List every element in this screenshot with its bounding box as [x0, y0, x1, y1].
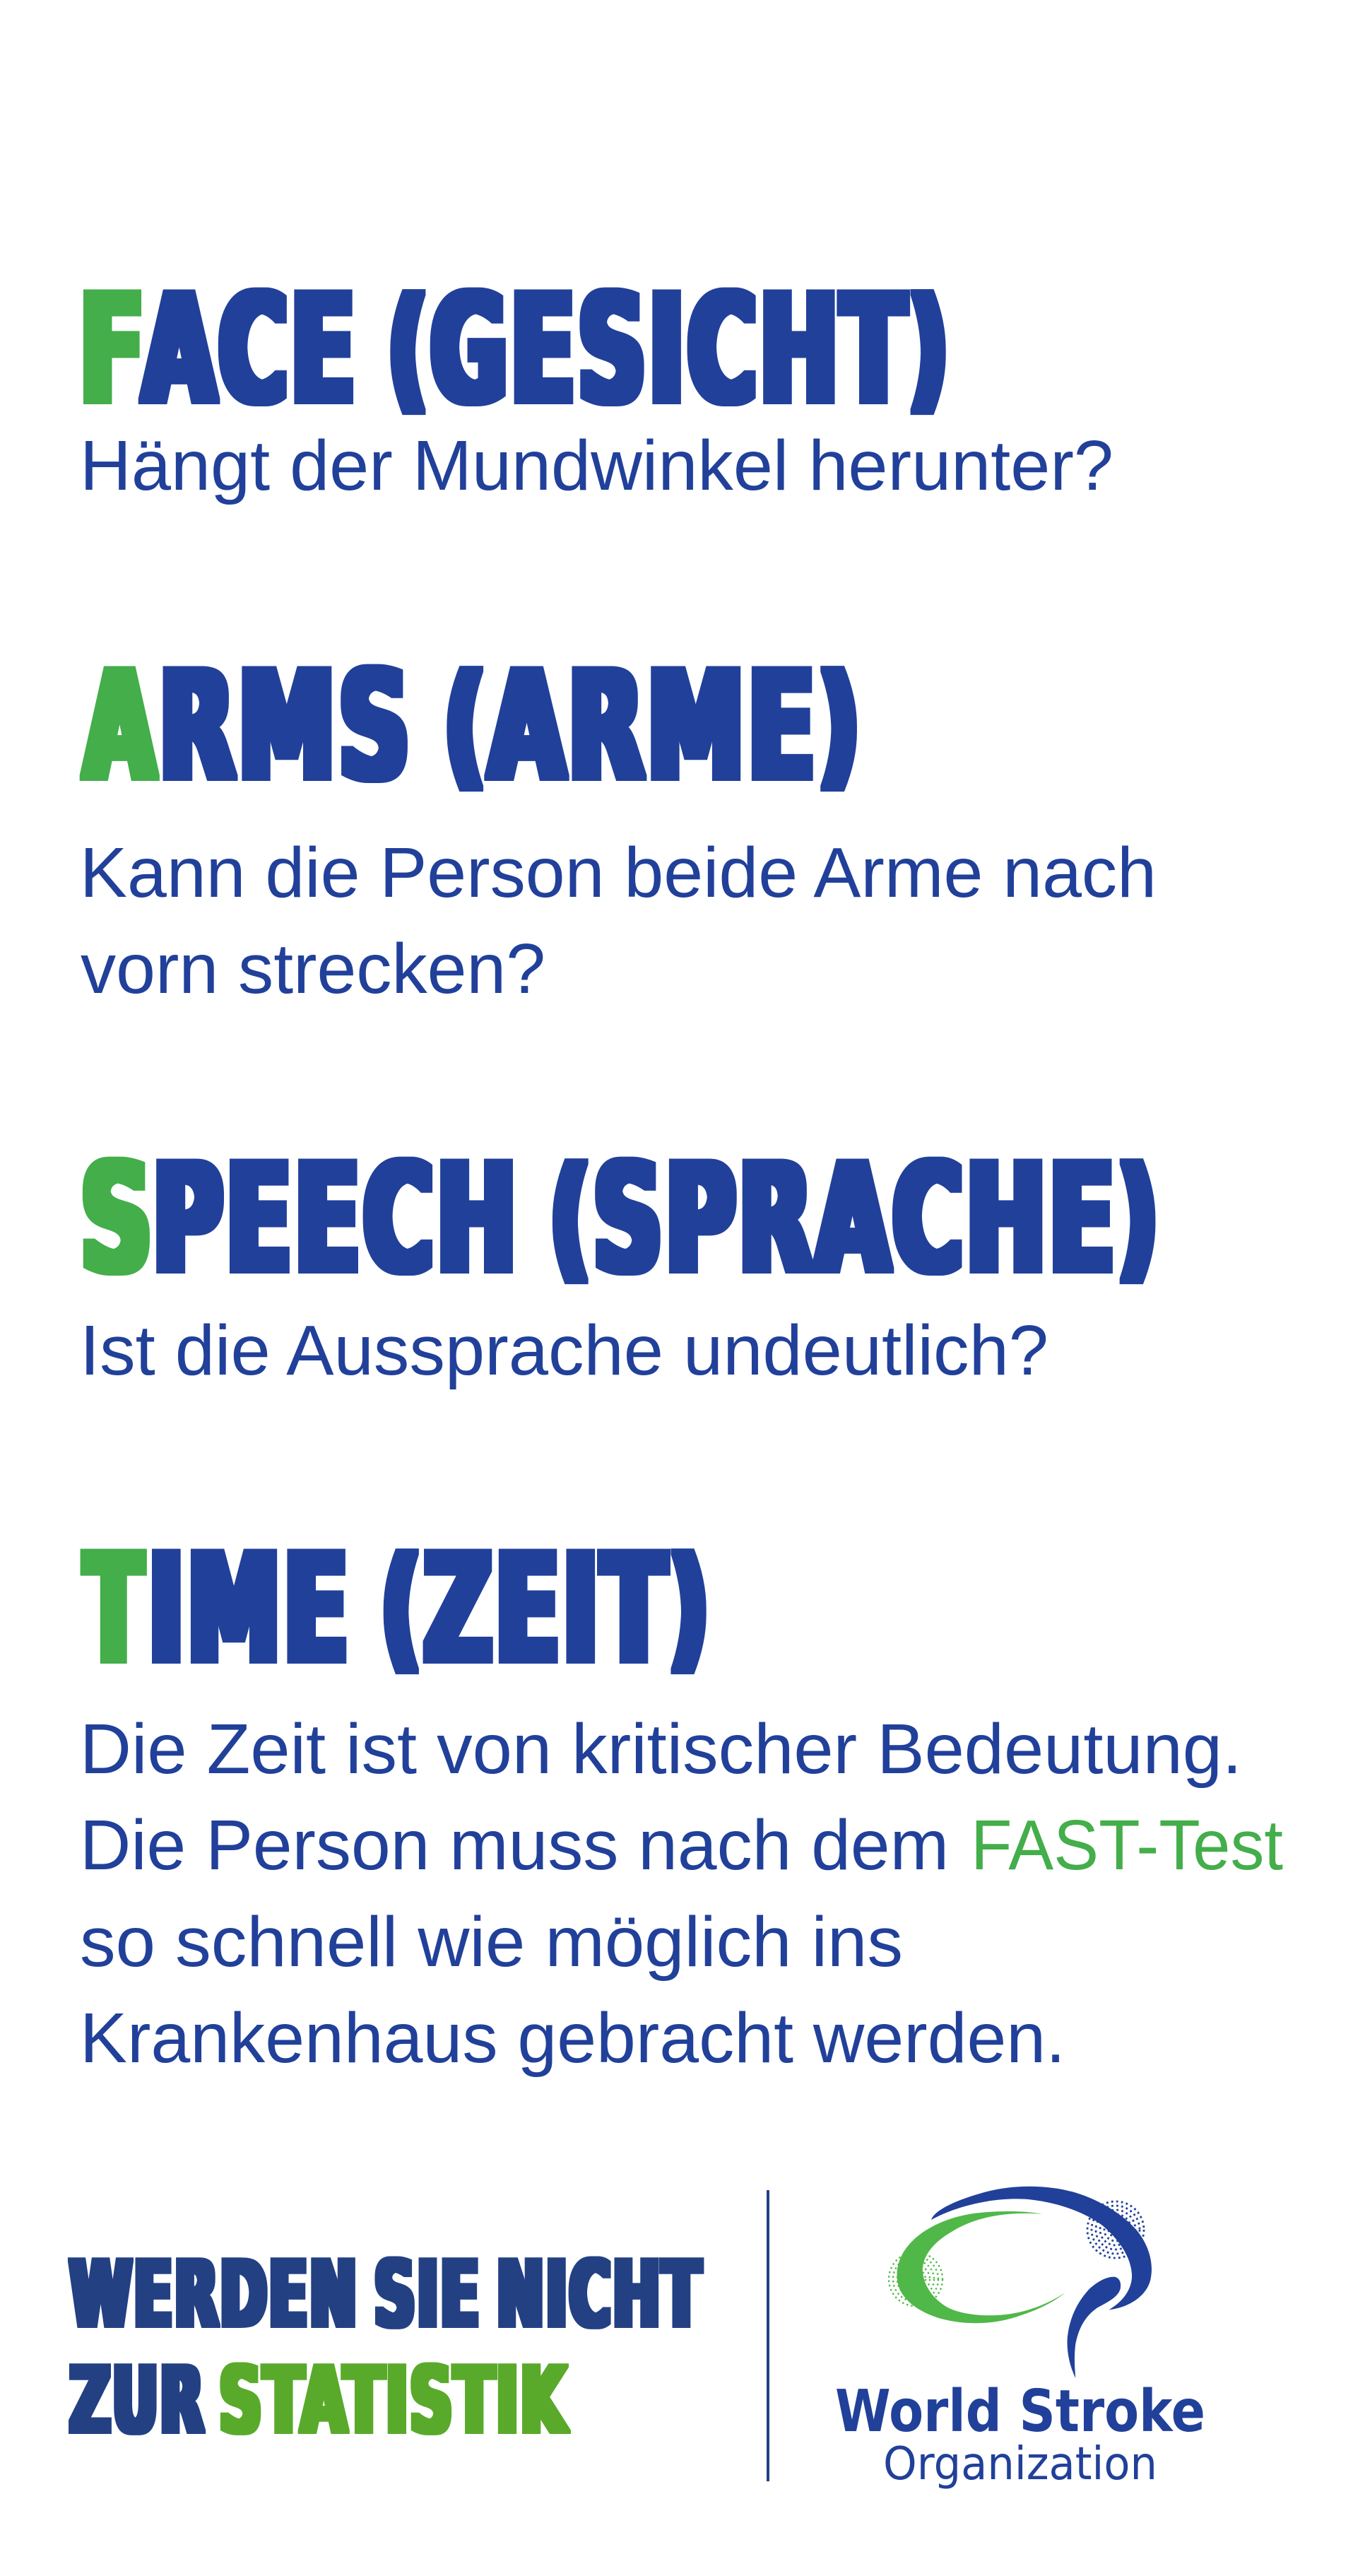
heading: ARMS (ARME): RMS [160, 639, 553, 813]
text: time line 1: Die Zeit ist von kritischer Bedeutung. [80, 1710, 1242, 1789]
text: time line 2: Die Person muss nach dem [80, 1806, 949, 1885]
heading: ARMS initial: A [85, 639, 155, 813]
heading: FACE initial: F [81, 262, 143, 437]
heading: TIME initial: T [85, 1522, 141, 1696]
heading: TIME (ZEIT): ( [382, 1529, 425, 1686]
section: arms [80, 639, 1157, 1008]
heading: ARMS (ARME): ARME [490, 639, 819, 813]
text: arms question line 2: vorn strecken? [81, 929, 545, 1008]
icon: green dots [889, 2252, 942, 2306]
heading: SPEECH initial: S [81, 1131, 151, 1306]
text: speech question: Ist die Aussprache undeutlich? [80, 1311, 1048, 1390]
logo: World Stroke Organization [835, 2187, 1205, 2490]
heading: SPEECH (SPRACHE): PEECH [153, 1131, 738, 1306]
heading: TIME (ZEIT): ) [670, 1529, 712, 1686]
heading: FACE (GESICHT): ACE [143, 262, 492, 437]
section: face [80, 262, 1113, 505]
slogan line 1: WERDEN SIE NICHT [70, 2240, 703, 2348]
heading: FACE (GESICHT): GESICHT [431, 262, 909, 437]
text: face question: Hängt der Mundwinkel herunter? [80, 426, 1113, 505]
slogan line 2: STATISTIK: STATISTIK [220, 2346, 568, 2454]
icon: blue dots [1087, 2201, 1144, 2258]
heading: TIME (ZEIT): IME [149, 1522, 478, 1696]
text: arms question line 1: Kann die Person beide Arme nach [80, 833, 1157, 912]
text: time line 3: so schnell wie möglich ins [80, 1902, 903, 1982]
slogan [70, 2240, 703, 2454]
section: time [80, 1522, 1283, 2078]
heading: TIME (ZEIT): ZEIT [425, 1522, 670, 1696]
slogan line 2: ZUR: ZUR [70, 2346, 206, 2454]
heading: FACE (GESICHT): ) [909, 270, 952, 427]
section: speech [80, 1131, 1162, 1390]
icon: brain swooshes [897, 2187, 1152, 2378]
text: FAST-Test highlight: FAST-Test [971, 1806, 1283, 1885]
logo text: World Stroke: World Stroke [835, 2378, 1205, 2445]
heading: ARMS (ARME): ( [445, 647, 490, 804]
heading: FACE (GESICHT): ( [389, 270, 431, 427]
heading: ARMS (ARME): ) [819, 647, 863, 804]
heading: SPEECH (SPRACHE): ) [1118, 1139, 1162, 1296]
heading: SPEECH (SPRACHE): ( [551, 1139, 594, 1296]
logo text: Organization: Organization [883, 2438, 1157, 2490]
text: time line 4: Krankenhaus gebracht werden. [80, 1999, 1065, 2078]
